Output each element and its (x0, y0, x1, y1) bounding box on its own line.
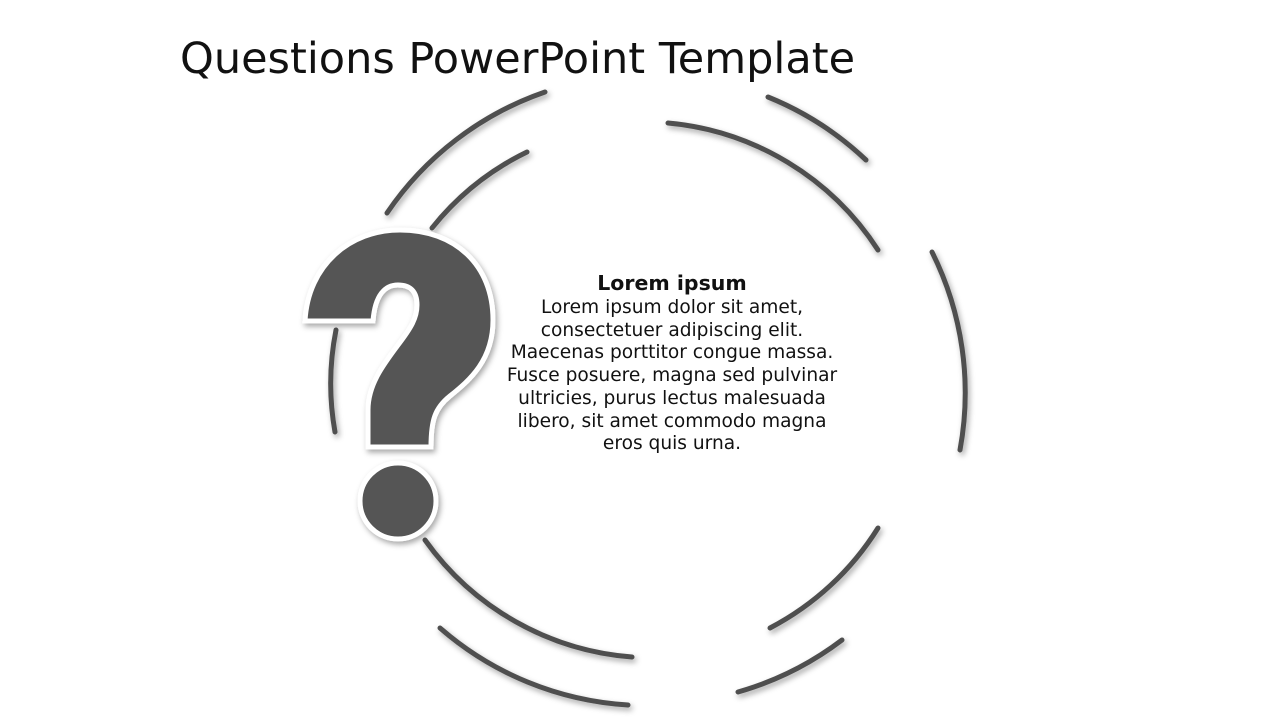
text block: Lorem ipsum (597, 271, 747, 295)
text block: ultricies, purus lectus malesuada (518, 388, 826, 409)
arcs (331, 92, 965, 705)
text block: Maecenas porttitor congue massa. (511, 342, 833, 363)
text block: consectetuer adipiscing elit. (541, 320, 803, 341)
text block: Fusce posuere, magna sed pulvinar (507, 365, 837, 386)
title: Questions PowerPoint Template (180, 34, 855, 84)
text block: eros quis urna. (603, 433, 741, 454)
text block (507, 271, 838, 454)
text block: Lorem ipsum dolor sit amet, (541, 297, 803, 318)
icon: question mark (305, 230, 493, 539)
text block: libero, sit amet commodo magna (518, 411, 826, 432)
